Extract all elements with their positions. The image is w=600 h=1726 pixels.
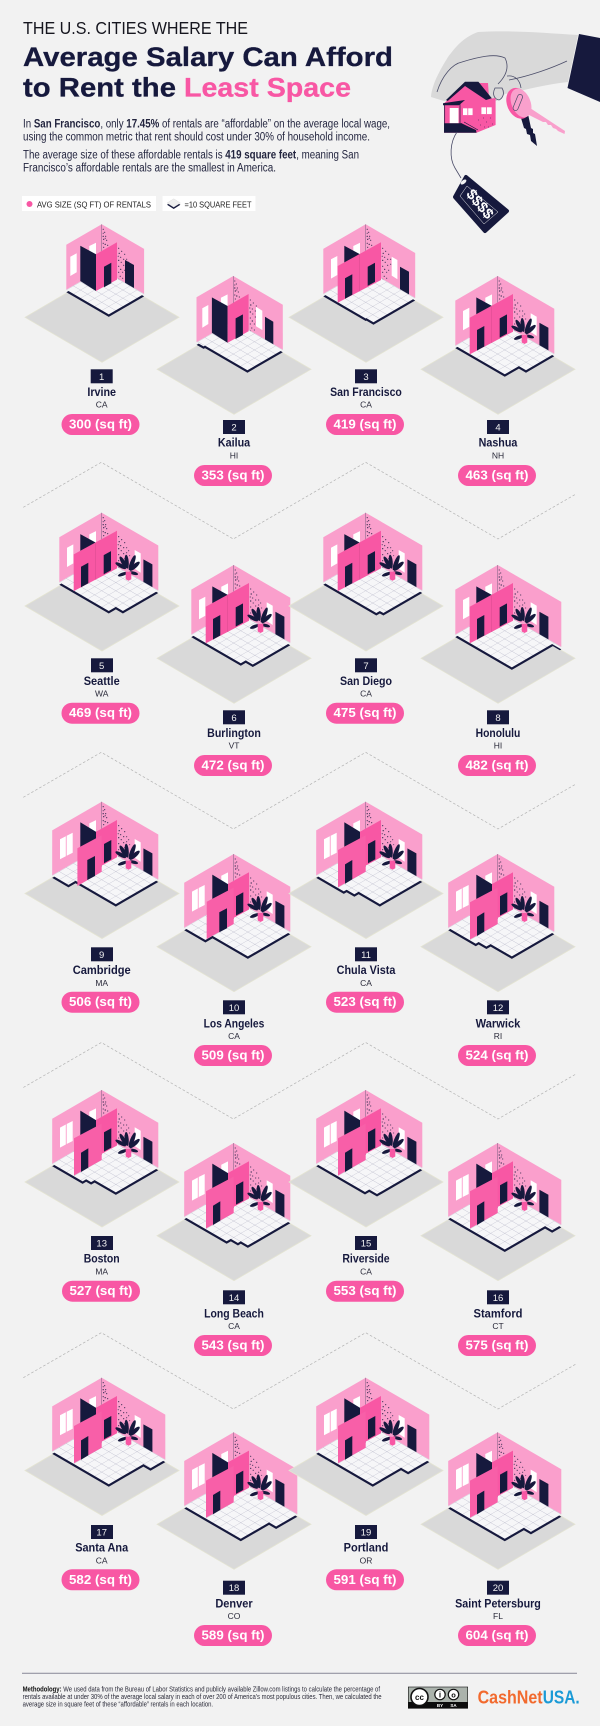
creative commons badge: i <box>439 1690 441 1700</box>
room 12 <box>448 854 554 963</box>
card 15: Riverside: CA <box>360 1267 372 1277</box>
card 15: Riverside <box>289 1090 443 1302</box>
card 15: Riverside: Riverside <box>342 1252 390 1266</box>
legend: tile scale: =10 SQUARE FEET <box>184 199 252 209</box>
card 8: Honolulu: Honolulu <box>476 726 520 740</box>
card 3: San Francisco: San Francisco <box>330 385 402 399</box>
creative commons badge: cc <box>415 1693 424 1702</box>
title block <box>23 18 393 103</box>
room 5 <box>59 513 158 618</box>
dashed separator row 1-2 <box>23 462 576 539</box>
card 20: Saint Petersburg <box>421 1432 575 1646</box>
card 5: Seattle: 5 <box>99 661 104 672</box>
house <box>443 82 496 133</box>
card 20: Saint Petersburg: FL <box>493 1611 503 1621</box>
card 10: Los Angeles: 509 (sq ft) <box>202 1048 264 1062</box>
card 3: San Francisco: CA <box>360 400 372 410</box>
CashNetUSA logo: USA. <box>543 1687 580 1707</box>
card 3: San Francisco <box>289 224 443 435</box>
pink key <box>502 84 565 134</box>
room 2 <box>196 276 283 374</box>
card 2: Kailua: 2 <box>231 422 237 434</box>
card 1: Irvine: 300 (sq ft) <box>69 418 132 432</box>
CashNetUSA logo: CashNet <box>478 1687 543 1707</box>
card 19: Portland: 19 <box>361 1528 371 1538</box>
card 7: San Diego: CA <box>360 689 372 699</box>
card 19: Portland: 591 (sq ft) <box>334 1573 396 1587</box>
card 5: Seattle: Seattle <box>84 674 120 688</box>
card 18: Denver: Denver <box>215 1597 253 1611</box>
room 17 <box>52 1378 165 1491</box>
card 11: Chula Vista: 523 (sq ft) <box>334 995 396 1009</box>
room 20 <box>448 1432 561 1545</box>
intro paragraph 1: using the common metric that rent should cost under 30% of household income. <box>23 132 370 144</box>
card 15: Riverside: 15 <box>361 1238 371 1250</box>
card 15: Riverside: 553 (sq ft) <box>334 1284 396 1298</box>
card 13: Boston <box>25 1090 179 1302</box>
card 8: Honolulu: 8 <box>495 713 501 724</box>
card 20: Saint Petersburg: 20 <box>493 1583 503 1594</box>
card 8: Honolulu: HI <box>494 741 502 751</box>
card 19: Portland <box>289 1378 443 1590</box>
card 12: Warwick <box>421 854 575 1066</box>
card 12: Warwick: RI <box>494 1031 502 1041</box>
card 3: San Francisco: 3 <box>363 372 369 383</box>
price tag <box>455 177 507 231</box>
card 4: Nashua: 4 <box>495 422 501 434</box>
card 6: Burlington: 6 <box>231 713 237 724</box>
room 8 <box>455 565 561 674</box>
card 18: Denver: 18 <box>229 1583 239 1594</box>
card 14: Long Beach: 543 (sq ft) <box>202 1338 264 1352</box>
dashed separator row 2-3 <box>23 752 576 829</box>
card 7: San Diego: 7 <box>363 661 369 672</box>
card 18: Denver <box>157 1432 311 1646</box>
room 15 <box>316 1090 422 1199</box>
card 2: Kailua <box>157 276 311 486</box>
card 9: Cambridge: 506 (sq ft) <box>69 995 132 1009</box>
room 1 <box>66 224 144 317</box>
card 13: Boston: Boston <box>84 1252 120 1266</box>
tag string <box>451 132 461 178</box>
dashed separator row 3-4 <box>23 1042 576 1119</box>
card 7: San Diego <box>289 513 443 724</box>
card 12: Warwick: Warwick <box>476 1016 521 1030</box>
card 2: Kailua: HI <box>230 450 238 460</box>
card 3: San Francisco: 419 (sq ft) <box>334 418 396 432</box>
card 9: Cambridge <box>25 802 179 1013</box>
card 18: Denver: CO <box>228 1611 241 1621</box>
room 3 <box>323 224 415 325</box>
card 13: Boston: MA <box>95 1267 108 1277</box>
room 14 <box>184 1143 290 1252</box>
card 2: Kailua: 353 (sq ft) <box>202 468 264 482</box>
room 7 <box>323 513 422 618</box>
finger lines <box>437 56 567 100</box>
price tag: $$$$ <box>462 186 497 223</box>
room 9 <box>52 802 158 911</box>
title highlight: Least Space <box>184 73 351 103</box>
dashed separator row 4-5 <box>23 1333 576 1409</box>
legend: tile scale <box>162 196 256 211</box>
card 12: Warwick: 12 <box>493 1003 503 1014</box>
intro paragraph 1: In San Francisco, only 17.45% of rentals are “affordable” on the average local wage, <box>23 119 390 131</box>
card 16: Stamford: 575 (sq ft) <box>466 1338 528 1352</box>
room 16 <box>448 1143 561 1256</box>
legend: average size: AVG SIZE (SQ FT) OF RENTALS <box>37 199 151 209</box>
card 10: Los Angeles: 10 <box>229 1003 239 1014</box>
card 14: Long Beach: CA <box>228 1321 240 1331</box>
creative commons badge <box>408 1687 468 1708</box>
card 8: Honolulu: 482 (sq ft) <box>466 758 528 772</box>
card 11: Chula Vista <box>289 802 443 1013</box>
card 11: Chula Vista: 11 <box>361 950 371 961</box>
sleeve cuff <box>568 34 600 102</box>
card 13: Boston: 13 <box>96 1238 107 1250</box>
card 4: Nashua: NH <box>492 450 504 460</box>
card 4: Nashua: Nashua <box>479 436 518 450</box>
card 1: Irvine: 1 <box>99 372 104 383</box>
creative commons badge: BY <box>437 1703 443 1708</box>
card 4: Nashua <box>421 276 575 486</box>
methodology text <box>23 1684 382 1708</box>
card 16: Stamford <box>421 1143 575 1356</box>
card 14: Long Beach: Long Beach <box>204 1307 264 1321</box>
card 1: Irvine: Irvine <box>87 385 116 399</box>
card 1: Irvine <box>25 224 179 435</box>
intro paragraph 2 <box>23 150 359 175</box>
room 13 <box>52 1090 158 1199</box>
card 16: Stamford: Stamford <box>474 1307 522 1321</box>
intro paragraph 2: Francisco’s affordable rentals are the smallest in America. <box>23 163 276 175</box>
card 4: Nashua: 463 (sq ft) <box>466 468 528 482</box>
title line 1: Average Salary Can Afford <box>23 42 393 72</box>
room 11 <box>316 802 422 911</box>
card 6: Burlington <box>157 565 311 776</box>
room 19 <box>316 1378 429 1491</box>
card 6: Burlington: Burlington <box>207 726 261 740</box>
card 14: Long Beach: 14 <box>229 1293 239 1304</box>
card 9: Cambridge: Cambridge <box>73 963 131 977</box>
title kicker: THE U.S. CITIES WHERE THE <box>23 18 248 38</box>
card 13: Boston: 527 (sq ft) <box>70 1284 132 1298</box>
card 6: Burlington: VT <box>229 741 239 751</box>
room 4 <box>455 276 554 381</box>
card 17: Santa Ana <box>25 1378 179 1590</box>
card 8: Honolulu <box>421 565 575 776</box>
intro paragraph 1 <box>23 119 390 144</box>
card 17: Santa Ana: 17 <box>96 1528 107 1538</box>
dark key <box>521 114 537 146</box>
card 19: Portland: OR <box>360 1555 372 1565</box>
card 17: Santa Ana: CA <box>96 1555 108 1565</box>
card 17: Santa Ana: Santa Ana <box>75 1541 128 1555</box>
card 2: Kailua: Kailua <box>218 436 250 450</box>
card 11: Chula Vista: CA <box>360 978 372 988</box>
methodology text: Methodology: We used data from the Bureau of Labor Statistics and publicly available Zillow.com listings to calculate the percentage of <box>23 1684 381 1694</box>
card 10: Los Angeles: CA <box>228 1031 240 1041</box>
card 5: Seattle <box>25 513 179 724</box>
methodology text: average size in square feet of these “affordable” rentals in each location. <box>23 1699 213 1708</box>
card 10: Los Angeles <box>157 854 311 1066</box>
card 16: Stamford: 16 <box>493 1293 503 1304</box>
card 18: Denver: 589 (sq ft) <box>202 1628 264 1642</box>
card 12: Warwick: 524 (sq ft) <box>466 1048 528 1062</box>
card 16: Stamford: CT <box>492 1321 504 1331</box>
methodology text: rentals available at under 30% of the average local salary in each of over 200 of America’s most populous cities. Then, we calculated the <box>23 1692 382 1701</box>
card 19: Portland: Portland <box>344 1541 388 1555</box>
card 5: Seattle: 469 (sq ft) <box>69 706 132 720</box>
card 5: Seattle: WA <box>95 689 109 699</box>
card 20: Saint Petersburg: Saint Petersburg <box>455 1597 541 1611</box>
intro paragraph 2: The average size of these affordable rentals is 419 square feet, meaning San <box>23 150 359 162</box>
card 17: Santa Ana: 582 (sq ft) <box>69 1573 132 1587</box>
card 7: San Diego: 475 (sq ft) <box>334 706 396 720</box>
hand <box>431 31 578 101</box>
creative commons badge: SA <box>450 1703 457 1708</box>
title line 2: to Rent the <box>23 73 176 103</box>
card 9: Cambridge: 9 <box>99 950 104 961</box>
room 6 <box>191 565 290 670</box>
room 18 <box>184 1432 297 1545</box>
card 9: Cambridge: MA <box>95 978 108 988</box>
card 6: Burlington: 472 (sq ft) <box>202 758 264 772</box>
legend: average size <box>22 196 156 211</box>
footer rule <box>22 1673 577 1674</box>
card 1: Irvine: CA <box>96 400 108 410</box>
card 20: Saint Petersburg: 604 (sq ft) <box>466 1628 528 1642</box>
card 10: Los Angeles: Los Angeles <box>204 1016 265 1030</box>
illustration: hand holding house, keys and price tag <box>431 31 600 231</box>
room 10 <box>184 854 290 963</box>
creative commons badge: o <box>451 1690 456 1700</box>
card 14: Long Beach <box>157 1143 311 1356</box>
card 11: Chula Vista: Chula Vista <box>337 963 396 977</box>
card 7: San Diego: San Diego <box>340 674 392 688</box>
